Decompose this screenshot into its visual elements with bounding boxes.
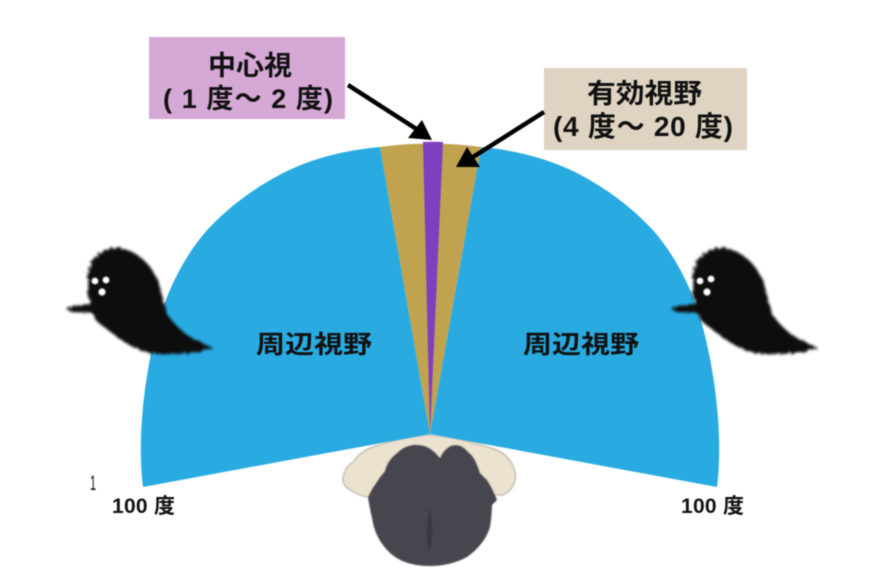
label: peripheral vision right: 周辺視野 [523, 331, 639, 359]
hair parting [427, 508, 432, 553]
head viewed from above [343, 435, 515, 566]
arrow: to effective vision [456, 112, 544, 167]
ghost right [670, 248, 818, 354]
central vision sector [423, 142, 443, 434]
hair [368, 445, 497, 566]
shoulders and hands [343, 435, 515, 497]
callout: effective vision [544, 68, 747, 150]
callout: central vision: 中心視 [208, 51, 292, 81]
stray mark: 1 [90, 472, 96, 495]
callout: effective vision: 有効視野 [587, 79, 702, 109]
arrow: to central vision [348, 85, 432, 140]
callout: central vision [149, 37, 345, 119]
effective vision sector [380, 144, 481, 434]
ghost eyes [697, 276, 714, 296]
ghost left [65, 248, 213, 354]
peripheral vision right sector [430, 147, 719, 487]
peripheral vision left sector [141, 147, 430, 487]
callout: effective vision: (4 度～ 20 度) [553, 111, 733, 142]
label: 100 degrees left: 100 度 [112, 495, 175, 518]
label: peripheral vision left: 周辺視野 [256, 331, 372, 359]
blue accents by hair [404, 444, 463, 454]
ghost eyes [92, 277, 109, 296]
label: 100 degrees right: 100 度 [681, 495, 744, 518]
callout: central vision: ( 1 度～ 2 度) [163, 84, 333, 114]
